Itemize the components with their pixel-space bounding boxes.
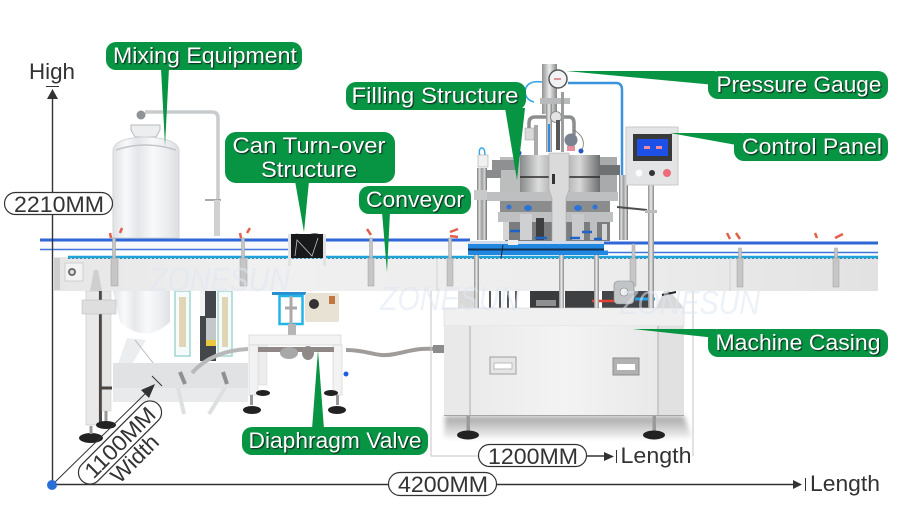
blue carousel plate [468, 241, 604, 245]
length axis: 4200MM [398, 472, 488, 497]
outline behind base [431, 291, 693, 456]
tank drum [518, 155, 600, 193]
callout: mixing equipment [106, 42, 302, 146]
pressure regulator [614, 281, 634, 304]
callout: can turn-over structure [225, 132, 395, 232]
height axis: High [29, 59, 75, 84]
hose to filling machine [346, 349, 440, 355]
width dimension [52, 376, 166, 489]
width dimension: Width [105, 429, 164, 488]
centre plate [549, 153, 569, 243]
callout: diaphragm valve [242, 350, 428, 455]
callout: pressure gauge [566, 71, 888, 99]
air hoses [525, 82, 542, 102]
conveyor brackets and clamps [111, 238, 839, 287]
callout: machine casing: Machine Casing [716, 330, 880, 355]
flow meters [175, 291, 232, 361]
callout: filling structure: Filling Structure [352, 83, 518, 108]
callout: filling structure [346, 82, 526, 180]
filling structure [468, 64, 647, 258]
machine feet [457, 416, 665, 440]
callout: conveyor: Conveyor [366, 187, 464, 212]
drawer handles [490, 357, 639, 375]
red clamp handles [110, 228, 843, 239]
height axis [4, 59, 112, 485]
callout: pressure gauge: Pressure Gauge [716, 72, 882, 97]
diaphragm valve assembly [192, 292, 445, 414]
height axis: 2210MM [14, 192, 104, 217]
width dimension: 1100MM [79, 402, 161, 483]
callout: machine casing [633, 329, 888, 357]
origin dot [47, 480, 57, 490]
machine length dimension: Length [620, 443, 692, 468]
machine length dimension [478, 443, 692, 469]
mixing tank equipment [112, 110, 248, 414]
callout: conveyor [359, 186, 471, 272]
length axis: Length [810, 471, 880, 496]
watermarks: ZONESUN [379, 280, 520, 317]
arm rod [617, 207, 647, 210]
callout: control panel [670, 133, 888, 161]
callout: control panel: Control Panel [742, 134, 882, 159]
pressure gauge dial [549, 70, 567, 88]
watermarks: ZONESUN [619, 284, 760, 321]
callout: mixing equipment: Mixing Equipment [113, 43, 297, 68]
can turn-over structure [288, 233, 326, 266]
posts through conveyor [474, 255, 599, 308]
machine length dimension: 1200MM [488, 444, 578, 469]
conveyor [40, 239, 878, 291]
callout: can turn-over structure: Structure [261, 157, 357, 182]
control panel [626, 127, 678, 308]
watermarks [149, 261, 760, 321]
length axis [52, 471, 880, 497]
callout: can turn-over structure: Can Turn-over [232, 133, 386, 158]
callout: diaphragm valve: Diaphragm Valve [248, 428, 422, 453]
watermarks: ZONESUN [149, 261, 290, 298]
conveyor support leg [79, 291, 116, 443]
filling valves [500, 201, 610, 212]
machine casing [444, 308, 692, 440]
mechanism under conveyor [458, 291, 684, 308]
